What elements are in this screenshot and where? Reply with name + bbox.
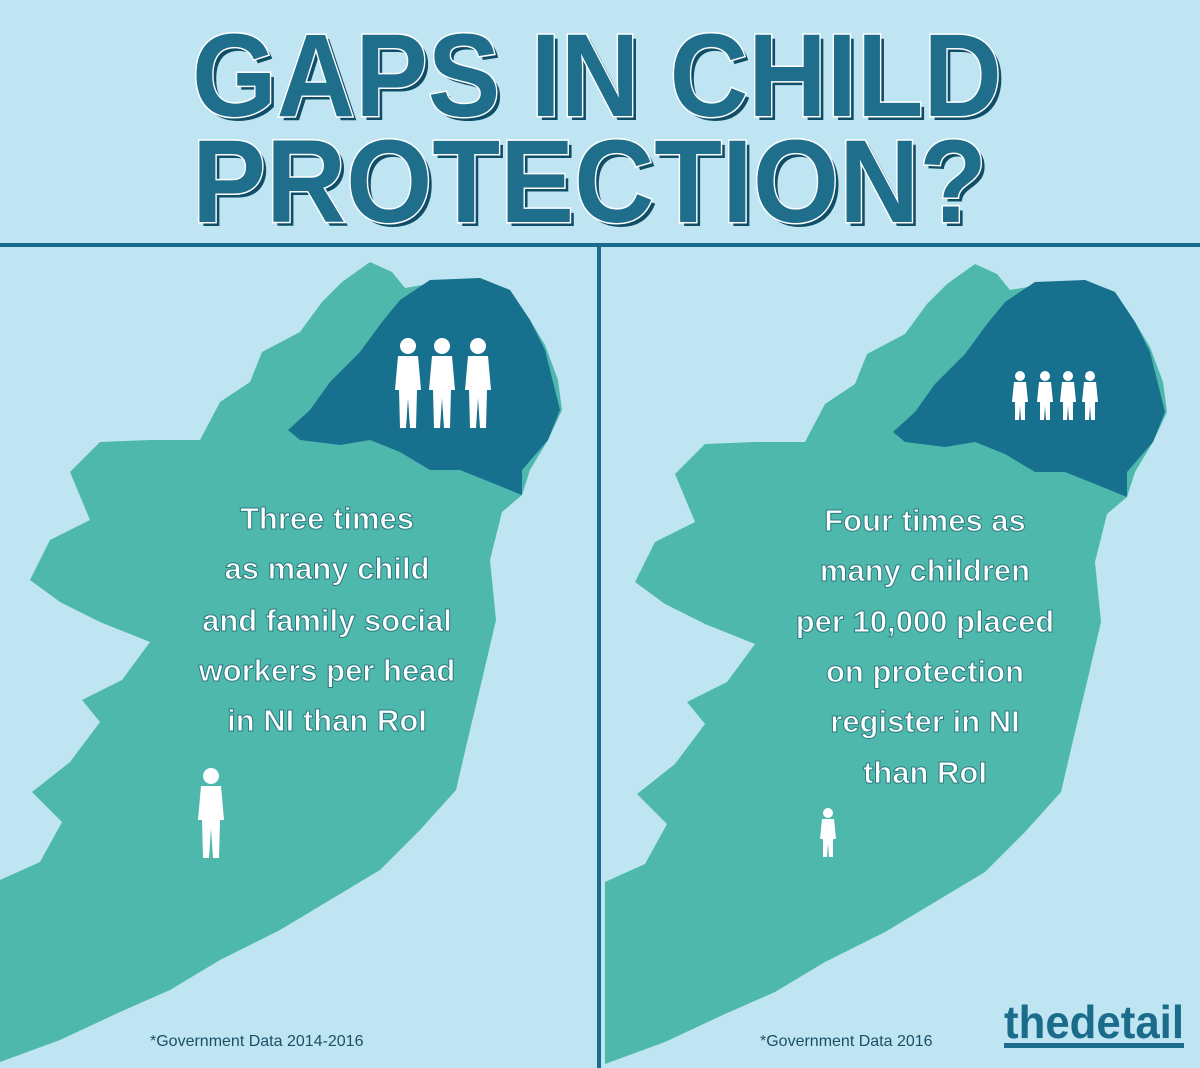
footnote left: *Government Data 2014-2016: [150, 1033, 364, 1050]
title: PROTECTION?: [192, 116, 987, 248]
map: right island: [605, 264, 1167, 1064]
text: three times: and family social: [202, 603, 452, 638]
map: left island: [0, 262, 562, 1062]
title: [192, 10, 1006, 252]
title: GAPS IN CHILD: [192, 10, 1002, 142]
icon: NI adults: [395, 338, 491, 428]
icon: RoI adult: [198, 768, 224, 858]
panel: protection register: [605, 264, 1184, 1064]
text: four times: many children: [820, 553, 1030, 588]
text: four times: Four times as: [824, 503, 1026, 538]
text: three times: Three times: [240, 501, 414, 536]
text: three times: as many child: [224, 551, 430, 586]
text: four times: on protection: [826, 654, 1024, 689]
title: PROTECTION?: [196, 120, 991, 252]
panel: social workers: [0, 262, 562, 1062]
text: four times: [796, 503, 1054, 790]
title: GAPS IN CHILD: [196, 14, 1006, 146]
icon: NI children: [1012, 371, 1098, 420]
text: four times: register in NI: [830, 704, 1020, 739]
text: three times: [198, 501, 455, 738]
text: three times: in NI than RoI: [227, 703, 427, 738]
icon: RoI child: [820, 808, 836, 857]
text: three times: workers per head: [198, 653, 455, 688]
text: four times: per 10,000 placed: [796, 604, 1054, 639]
logo: thedetail: [1004, 996, 1184, 1048]
footnote right: *Government Data 2016: [760, 1033, 933, 1050]
text: four times: than RoI: [863, 755, 987, 790]
